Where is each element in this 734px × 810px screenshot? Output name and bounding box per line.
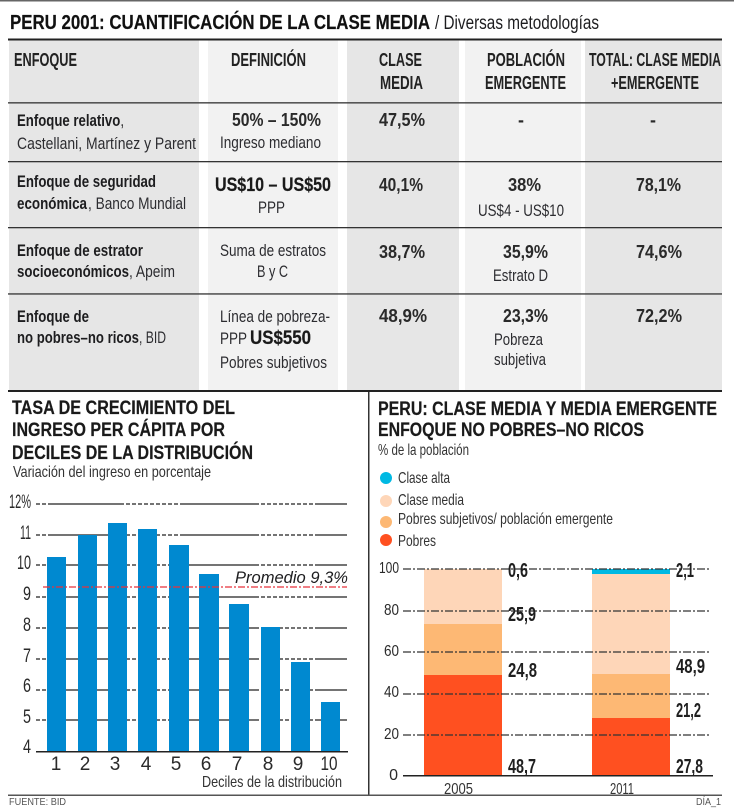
table row: estratos socioeconómicos [17,241,682,285]
subtitle: income growth: Variación del ingreso en porcentaje [13,464,211,481]
source: FUENTE: BID [9,797,66,808]
values 2005: 0,6 [508,560,528,582]
table row: seguridad económica: 78,1% [636,175,681,195]
table header row: CLASE [379,50,422,70]
values 2011: 2,1 [676,560,694,582]
x axis labels: 5 [171,754,181,775]
y axis labels: 20 [384,726,399,743]
table row: no pobres no ricos: subjetiva [494,350,546,369]
table row: enfoque relativo: Ingreso mediano [220,133,321,152]
legend: Clase media [398,492,464,509]
heading: income growth: INGRESO PER CÁPITA POR [12,419,225,441]
y axis labels [9,492,31,758]
x axis labels: 7 [232,754,242,775]
values 2011: 27,8 [676,756,703,778]
y axis labels: 0 [389,767,398,784]
table row: no pobres no ricos: , BID [139,328,166,347]
stacked bar chart [379,560,713,798]
panel: income growth by decile [9,398,348,791]
table row: no pobres no ricos: Pobres subjetivos [220,353,327,372]
panel: middle class composition [378,399,717,798]
y axis labels: 100 [379,560,399,577]
table row: no pobres no ricos [17,306,682,372]
table header row: POBLACIÓN [487,49,565,70]
values 2011: 21,2 [676,700,701,722]
year labels: 2011 [610,781,634,798]
x axis labels: 2 [80,754,90,775]
year labels [444,781,634,798]
y axis labels: 9 [23,584,31,605]
table row: estratos socioeconómicos: , Apeim [129,262,175,281]
y axis labels: 7 [23,646,31,667]
y axis labels: 4 [23,737,31,758]
table row: no pobres no ricos: Enfoque de [17,307,89,326]
panel: methodology table [8,38,722,392]
table row: estratos socioeconómicos: socioeconómicos [17,262,129,281]
x axis labels: 3 [110,754,120,775]
table row: seguridad económica [17,172,681,220]
table header row: MEDIA [380,73,423,93]
legend: Clase alta [398,470,450,487]
table header row: ENFOQUE [14,50,77,70]
page tag: DÍA_1 [696,795,721,808]
y axis labels: 80 [384,602,399,619]
table header row [14,49,721,93]
x axis title: Deciles de la distribución [202,774,342,791]
values 2011 [676,560,705,778]
table row: enfoque relativo: 47,5% [379,110,425,130]
x axis labels: 1 [51,754,61,775]
x axis labels: 10 [320,754,338,775]
average line: Promedio 9,3% [235,568,348,587]
bar 2005 [424,569,502,776]
legend: Pobres [398,533,436,550]
y axis labels: 5 [23,707,31,728]
x axis labels [51,754,338,775]
values 2005: 25,9 [508,604,536,626]
table row: estratos socioeconómicos: Enfoque de estrator [17,241,143,260]
x axis labels: 6 [201,754,211,775]
table row: seguridad económica: US$10 – US$50 [215,175,331,196]
table row: estratos socioeconómicos: Estrato D [493,266,548,285]
table row: seguridad económica: US$4 - US$10 [478,201,564,220]
table row: estratos socioeconómicos: Suma de estratos [220,241,326,260]
table row: enfoque relativo: Castellani, Martínez y Parent [17,134,196,153]
table row: enfoque relativo: 50% – 150% [232,110,321,130]
chart gridlines [36,504,347,720]
table row: enfoque relativo: - [518,110,524,130]
table row: no pobres no ricos: 23,3% [503,306,548,326]
heading: income growth [12,398,253,464]
table row: seguridad económica: 40,1% [379,175,423,195]
legend [380,470,613,550]
heading: middle class [378,399,717,441]
heading: income growth: DECILES DE LA DISTRIBUCIÓN [12,442,253,464]
y axis labels: 40 [384,684,399,701]
y axis labels: 6 [23,676,31,697]
table row: seguridad económica: Enfoque de seguridad [17,172,156,191]
table row: enfoque relativo [17,110,656,153]
table row: no pobres no ricos: US$550 [250,328,311,349]
table row: no pobres no ricos: 72,2% [636,306,682,326]
table row: estratos socioeconómicos: 74,6% [636,242,682,262]
y axis labels: 12% [9,492,31,513]
values 2005: 24,8 [508,660,537,682]
x axis labels: 8 [263,754,273,775]
x axis labels: 4 [141,754,152,775]
values 2005: 48,7 [508,756,536,778]
y axis labels: 11 [20,523,31,544]
table row: seguridad económica: PPP [258,198,285,217]
table row: enfoque relativo: - [650,110,656,130]
bars [47,523,340,751]
heading: middle class: ENFOQUE NO POBRES–NO RICOS [378,420,644,441]
table row: estratos socioeconómicos: B y C [257,262,288,281]
table row: no pobres no ricos: Pobreza [494,330,543,349]
bar chart: deciles [9,492,348,791]
table row: enfoque relativo: Enfoque relativo, [17,111,124,130]
table row: no pobres no ricos: 48,9% [379,306,427,326]
table header row: DEFINICIÓN [231,49,306,70]
table header row: EMERGENTE [485,73,566,93]
table row: seguridad económica: , Banco Mundial [88,194,186,213]
table row: no pobres no ricos: Línea de pobreza- [220,307,330,326]
y axis labels [379,560,399,784]
legend: Pobres subjetivos/ población emergente [398,511,613,528]
table header row: +EMERGENTE [611,73,699,93]
values 2005 [508,560,537,778]
table row: estratos socioeconómicos: 35,9% [503,242,548,262]
year labels: 2005 [444,781,473,798]
title: PERU 2001: CUANTIFICACIÓN DE LA CLASE MEDIA [10,10,430,34]
x axis labels: 9 [293,754,303,775]
heading: income growth: TASA DE CRECIMIENTO DEL [12,398,235,419]
table column backgrounds [8,38,722,392]
y axis labels: 10 [17,553,31,574]
table row: estratos socioeconómicos: 38,7% [379,242,425,262]
values 2011: 48,9 [676,656,705,678]
subtitle: middle class: % de la población [378,442,469,459]
table row: seguridad económica: 38% [508,175,541,195]
table row: no pobres no ricos: no pobres–no ricos [17,328,139,347]
y axis labels: 60 [384,643,399,660]
table row: no pobres no ricos: PPP [220,329,247,348]
title: / Diversas metodologías [435,13,599,34]
y axis labels: 8 [23,615,31,636]
table row: seguridad económica: económica [17,194,87,213]
bar 2011 [592,569,670,776]
